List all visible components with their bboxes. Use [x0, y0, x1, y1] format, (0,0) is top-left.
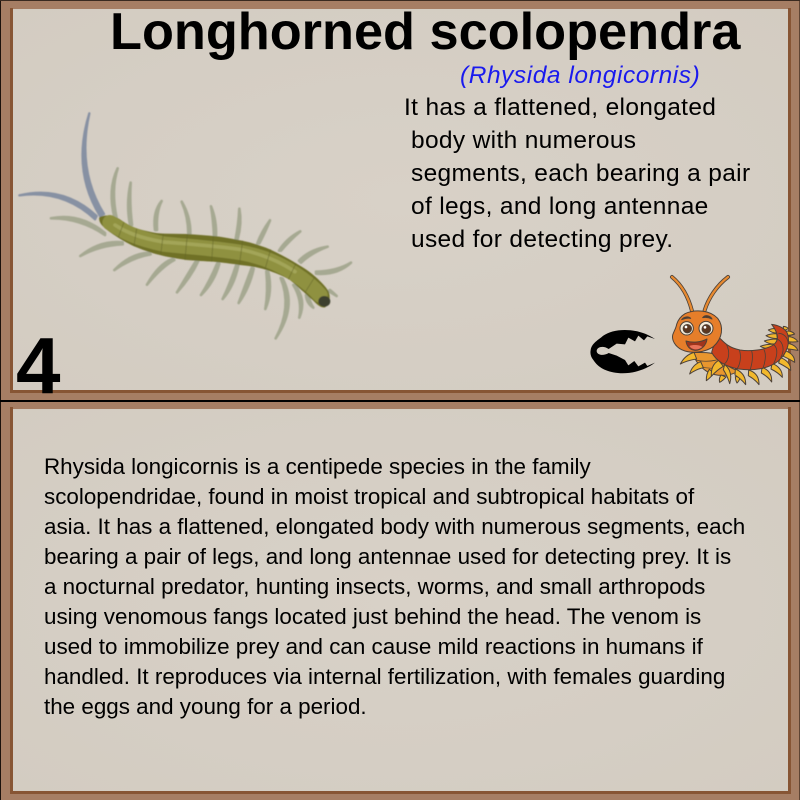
photo: centipede	[18, 112, 353, 340]
body text: a nocturnal predator, hunting insects, worms, and small arthropods	[44, 574, 705, 599]
mouth	[686, 339, 707, 350]
title: Longhorned scolopendra	[110, 3, 740, 61]
icon: venomous fangs	[590, 330, 655, 374]
body segments	[118, 222, 315, 293]
short description	[404, 94, 750, 253]
eyes	[680, 322, 693, 335]
head end	[318, 296, 330, 307]
body highlight	[115, 225, 295, 272]
body light band	[110, 223, 320, 295]
icon: cartoon centipede	[670, 274, 798, 386]
body text: the eggs and young for a period.	[44, 694, 367, 719]
legs	[51, 168, 351, 338]
short description: It has a flattened, elongated	[404, 94, 716, 121]
panel: description card bottom	[0, 402, 800, 800]
panel: species card top	[0, 0, 800, 400]
body text: handled. It reproduces via internal fertilization, with females guarding	[44, 664, 725, 689]
body segment lines	[724, 333, 788, 370]
head	[672, 311, 722, 352]
body text: using venomous fangs located just behind the head. The venom is	[44, 604, 701, 629]
belly	[693, 352, 738, 375]
short description: used for detecting prey.	[411, 226, 673, 253]
eyebrows	[682, 317, 691, 320]
back legs	[760, 326, 788, 349]
short description: of legs, and long antennae	[411, 193, 709, 220]
body text: used to immobilize prey and can cause mild reactions in humans if	[44, 634, 703, 659]
body text: scolopendridae, found in moist tropical and subtropical habitats of	[44, 484, 694, 509]
number 4: 4	[16, 321, 60, 410]
body text: bearing a pair of legs, and long antennae used for detecting prey. It is	[44, 544, 731, 569]
short description: body with numerous	[411, 127, 636, 154]
body text: Rhysida longicornis is a centipede species in the family	[44, 454, 591, 479]
body text	[44, 454, 745, 719]
body	[99, 215, 330, 307]
legs	[680, 331, 798, 385]
scientific name: (Rhysida longicornis)	[460, 62, 700, 89]
short description: segments, each bearing a pair	[411, 160, 750, 187]
antennae	[672, 277, 728, 311]
antennae	[19, 113, 104, 219]
red body	[712, 324, 789, 370]
body text: asia. It has a flattened, elongated body with numerous segments, each	[44, 514, 745, 539]
